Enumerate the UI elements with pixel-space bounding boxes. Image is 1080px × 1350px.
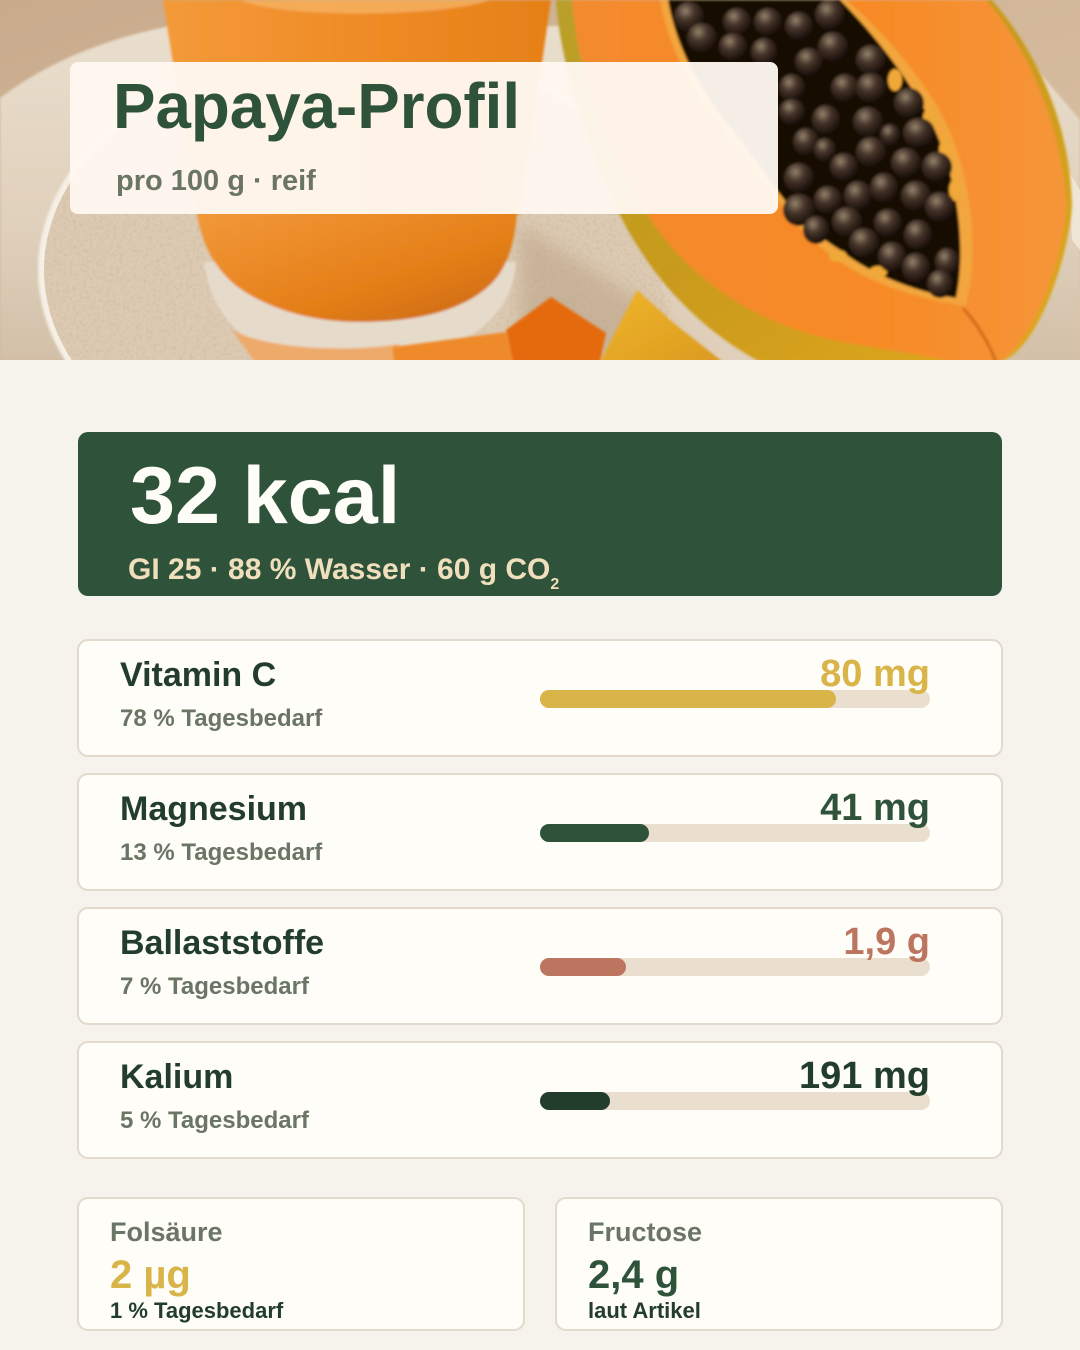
amount: 191 mg [799,1055,930,1097]
note: laut Artikel [588,1298,701,1323]
amount: 2 µg [110,1253,191,1297]
note: 1 % Tagesbedarf [110,1298,284,1323]
daily value: 5 % Tagesbedarf [120,1107,310,1134]
title panel [70,62,778,214]
daily value: 78 % Tagesbedarf [120,705,323,732]
plate [0,24,1080,360]
nutrient name: Kalium [120,1058,233,1096]
papaya half [556,0,1072,364]
panel: Ballaststoffe [78,908,1002,1024]
panel: calories [78,432,1002,596]
nutrient name: Ballaststoffe [120,924,324,962]
calorie value: 32 kcal [130,451,400,541]
calorie details: 2 [550,576,559,593]
bar: Magnesium [540,824,930,842]
panel: Vitamin C [78,640,1002,756]
bar: Kalium [540,1092,930,1110]
hero photo: papaya and smoothie [0,0,1080,360]
amount: 1,9 g [843,921,930,963]
label: Folsäure [110,1217,223,1247]
title: Papaya-Profil [113,71,520,142]
panel: Kalium [78,1042,1002,1158]
label: Fructose [588,1217,702,1247]
calorie details: GI 25 · 88 % Wasser · 60 g CO [128,553,550,586]
daily value: 7 % Tagesbedarf [120,973,310,1000]
panel: Folsäure [78,1198,524,1330]
bar: Ballaststoffe [540,958,930,976]
daily value: 13 % Tagesbedarf [120,839,323,866]
pulp flecks along the seed cavity [829,69,961,278]
glass of smoothie [163,0,551,364]
nutrient name: Magnesium [120,790,307,828]
amount: 41 mg [820,787,930,829]
amount: 80 mg [820,653,930,695]
papaya cubes [393,290,723,362]
panel: Fructose [556,1198,1002,1330]
subtitle: pro 100 g · reif [116,165,316,197]
amount: 2,4 g [588,1253,679,1297]
panel: Magnesium [78,774,1002,890]
bar: Vitamin C [540,690,930,708]
seeds [674,0,959,298]
nutrient name: Vitamin C [120,656,276,694]
